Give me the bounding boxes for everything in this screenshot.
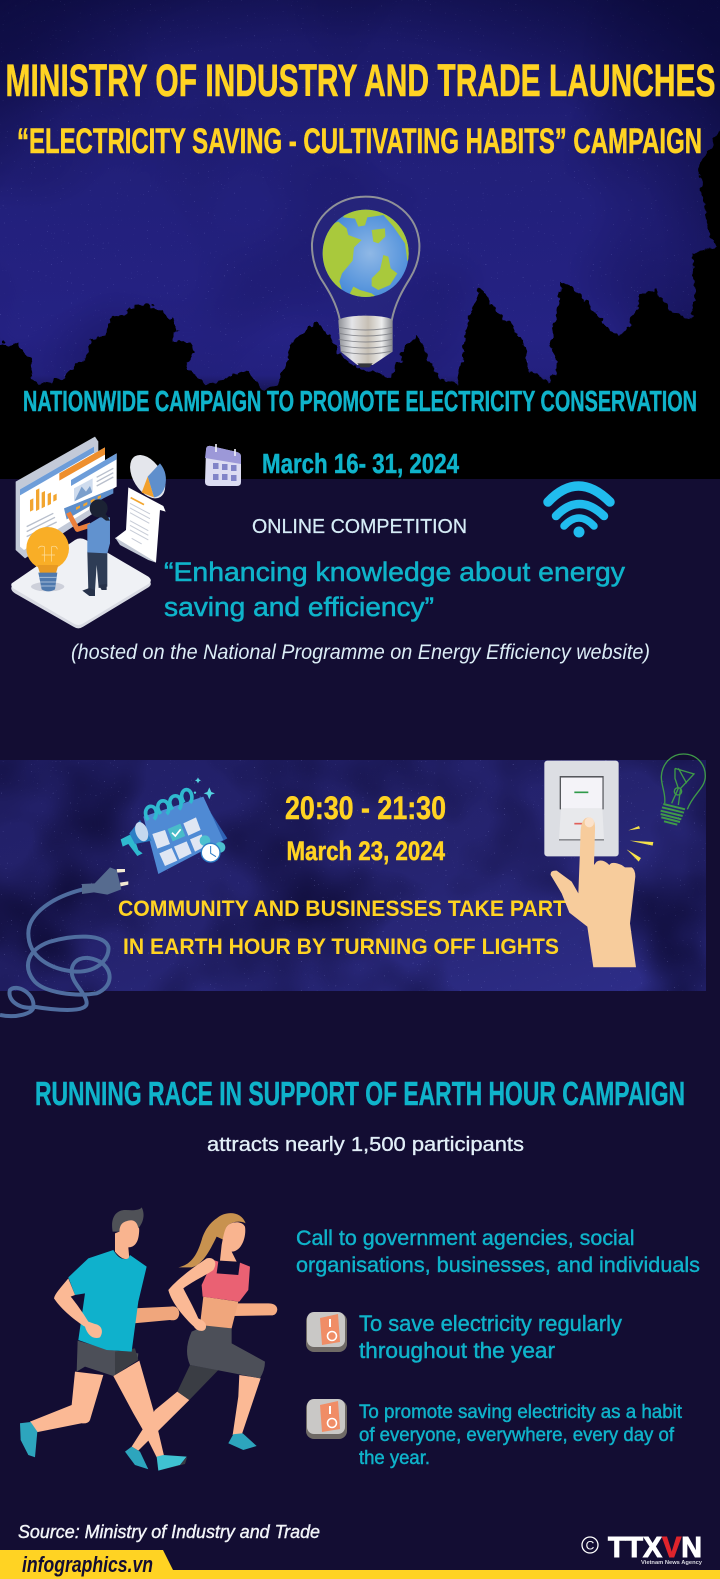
hero night sky with trees bbox=[0, 0, 720, 500]
list item 1 bbox=[359, 1311, 622, 1363]
text: participants: attracts nearly 1,500 participants bbox=[207, 1134, 524, 1156]
earth hour description: COMMUNITY AND BUSINESSES TAKE PART bbox=[118, 896, 567, 921]
icon: calendar bbox=[205, 444, 241, 486]
site name: infographics.vn bbox=[22, 1552, 153, 1577]
woman bbox=[125, 1213, 277, 1469]
logo: TTXVN: TTXVN bbox=[608, 1532, 702, 1564]
call to action text bbox=[296, 1227, 700, 1277]
illustration: two runners bbox=[20, 1207, 277, 1471]
list item 1: To save electricity regularly bbox=[359, 1311, 622, 1336]
list item 2: of everyone, everywhere, every day of bbox=[359, 1425, 675, 1446]
icon: outline light bulb bbox=[661, 754, 705, 825]
call to action text: organisations, businesses, and individuals bbox=[296, 1254, 700, 1277]
icon: wall switch with hand bbox=[544, 761, 653, 967]
time: 20:30 - 21:30 bbox=[285, 790, 446, 826]
list item 2 bbox=[359, 1402, 683, 1469]
list item 2: the year. bbox=[359, 1448, 430, 1469]
list item 1: throughout the year bbox=[359, 1338, 555, 1363]
earth hour description: IN EARTH HOUR BY TURNING OFF LIGHTS bbox=[123, 934, 559, 959]
icon: wifi bbox=[548, 486, 610, 538]
panel: earth hour banner bbox=[0, 760, 706, 991]
illustration: person at dashboard with bulb bbox=[11, 437, 173, 628]
logo: TTXVN: Vietnam News Agency bbox=[641, 1560, 703, 1566]
icon: switch 2 bbox=[306, 1399, 347, 1439]
note: hosted on website: (hosted on the National Programme on Energy Efficiency website) bbox=[71, 641, 650, 664]
date: March 23, 2024 bbox=[286, 836, 445, 866]
quote: competition name: “Enhancing knowledge about energy bbox=[164, 557, 626, 587]
man bbox=[20, 1207, 187, 1471]
logo: TTXVN: C bbox=[586, 1538, 595, 1552]
source: Source: Ministry of Industry and Trade bbox=[18, 1522, 320, 1542]
footer bar with site name bbox=[0, 1550, 720, 1579]
icon: light bulb with globe bbox=[312, 197, 419, 367]
label: online competition: ONLINE COMPETITION bbox=[252, 516, 467, 538]
list item 2: To promote saving electricity as a habit bbox=[359, 1402, 683, 1423]
date: march 16-31: March 16- 31, 2024 bbox=[262, 448, 459, 479]
title bbox=[6, 55, 716, 161]
icon: switch 1 bbox=[306, 1312, 347, 1352]
earth hour description bbox=[118, 896, 567, 959]
quote: competition name: saving and efficiency” bbox=[164, 592, 434, 622]
quote: competition name bbox=[164, 557, 626, 622]
icon: plug and cord bbox=[0, 867, 128, 1016]
earth hour time and date bbox=[285, 790, 446, 866]
call to action text: Call to government agencies, social bbox=[296, 1227, 634, 1250]
icon: calendar with megaphone and clock bbox=[121, 777, 227, 874]
